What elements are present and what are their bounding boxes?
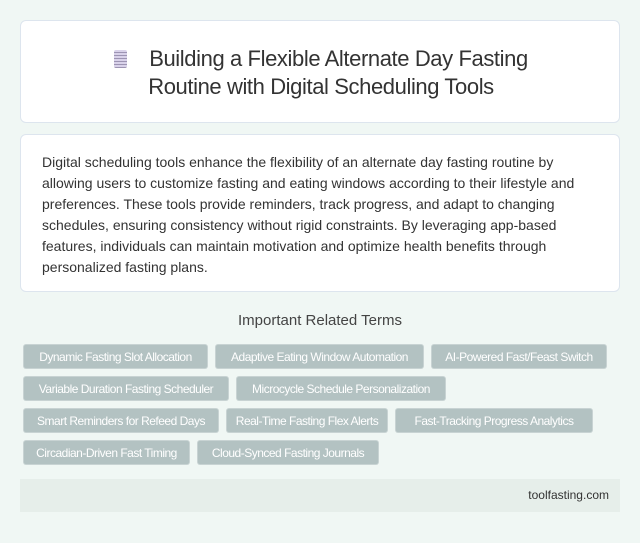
- tag: [216, 345, 423, 368]
- tag: [24, 377, 228, 400]
- heading: related terms: Important Related Terms: [238, 312, 402, 329]
- tag: [24, 345, 207, 368]
- tag: Variable Duration Fasting Scheduler: [39, 382, 213, 396]
- tag: [237, 377, 445, 400]
- tag: Real-Time Fasting Flex Alerts: [236, 414, 378, 428]
- tag: Adaptive Eating Window Automation: [231, 350, 408, 364]
- tag: Smart Reminders for Refeed Days: [37, 414, 205, 428]
- tag: [227, 409, 387, 432]
- tag: AI-Powered Fast/Feast Switch: [445, 350, 593, 364]
- tag: [24, 441, 189, 464]
- tag: Circadian-Driven Fast Timing: [36, 446, 177, 460]
- title card: [20, 20, 620, 123]
- title: Routine with Digital Scheduling Tools: [148, 74, 494, 99]
- title: [114, 46, 528, 99]
- tag: Cloud-Synced Fasting Journals: [212, 446, 364, 460]
- tag: [24, 409, 218, 432]
- title: Building a Flexible Alternate Day Fasting: [149, 46, 528, 71]
- tag: [198, 441, 378, 464]
- tag: Microcycle Schedule Personalization: [252, 382, 430, 396]
- tag: Dynamic Fasting Slot Allocation: [39, 350, 192, 364]
- tag: Fast-Tracking Progress Analytics: [415, 414, 573, 428]
- footer: [20, 479, 620, 512]
- footer source: toolfasting.com: [528, 488, 609, 502]
- tag: [432, 345, 606, 368]
- description text: Digital scheduling tools enhance the flexibility of an alternate day fasting routine by allowing users to customize fasting and eating windows according to their lifestyle and preferences. These tools provide reminders, track progress, and adapt to changing schedules, ensuring consistency without rigid constraints. By leveraging app-based features, individuals can maintain motivation and optimize health benefits through personalized fasting plans.: [42, 154, 574, 275]
- description card: [20, 134, 620, 292]
- icon: document: [114, 50, 127, 68]
- tag: [396, 409, 592, 432]
